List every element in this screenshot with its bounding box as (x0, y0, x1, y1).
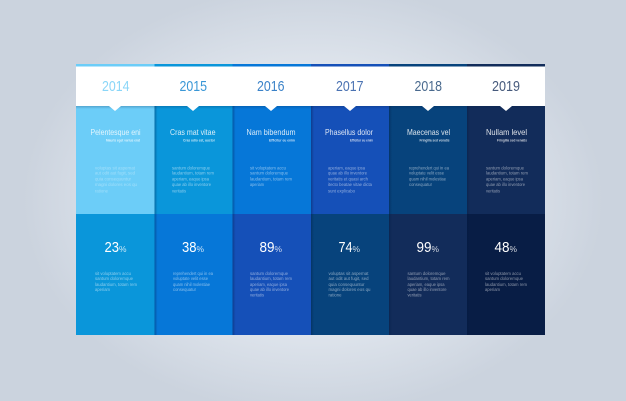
text: 2015 upper (172, 166, 214, 194)
stat: 23%: % (119, 244, 127, 254)
text: 2016 lower: laudantium, totam rem (250, 276, 292, 281)
text: 2018 upper: voluptate velit esse (409, 170, 444, 176)
text: 2014 upper: quia consequuntur (95, 176, 131, 182)
text: 2019 lower: sit voluptatem accu (485, 271, 521, 276)
text: 2014 upper: magni dolores eos qu (95, 182, 137, 187)
text: 2016 lower: veritatis (250, 292, 265, 298)
stat: 23%: 23 (104, 239, 119, 256)
text: 2016 lower: aperiam, eaque ipsa (250, 282, 287, 287)
text: 2018 lower: veritatis (408, 292, 422, 298)
text: 2015 upper: laudantium, totam rem (172, 170, 214, 176)
column headings: Maecenas vel (407, 127, 450, 137)
text: 2019 upper: laudantium, totam rem (486, 170, 528, 176)
stat: 38%: 38 (182, 239, 196, 256)
text: 2019 upper: quae ab illo inventore (486, 182, 525, 187)
text: 2016 upper: aperiam (250, 182, 264, 187)
column headings (90, 127, 527, 137)
column headings: Pelentesque eni (90, 127, 141, 137)
text: 2014 lower (95, 271, 137, 292)
text: 2018 upper: quam nihil molestiae (409, 176, 446, 182)
column subheadings (106, 138, 527, 142)
stat: 99%: % (432, 244, 439, 254)
text: 2016 lower (250, 271, 292, 298)
text: 2017 upper: quae ab illo inventore (328, 170, 367, 176)
year labels: 2019 (492, 78, 520, 95)
panel: 2017 column (311, 64, 389, 335)
text: 2016 upper: santum doloremque (250, 170, 288, 176)
text: 2016 lower: quae ab illo inventore (250, 287, 289, 292)
text: 2017 upper: aperiam, eaque ipsa (328, 166, 365, 170)
text: 2017 upper: itecto beatae vitae dicta (328, 182, 372, 187)
column subheadings: Efficitur eu enim (350, 138, 373, 142)
text: 2014 upper (95, 166, 137, 194)
text: 2018 upper: consequatur (409, 182, 432, 187)
upper body text (95, 166, 528, 194)
stat: 89%: % (274, 244, 282, 254)
column subheadings: Fringilla sed venatis (420, 138, 450, 142)
text: 2018 lower: aperiam, eaque ipsa (408, 282, 445, 287)
text: 2015 lower: consequatur (173, 287, 196, 292)
text: 2017 lower: ratione (328, 292, 342, 298)
text: 2019 upper: aperiam, eaque ipsa (486, 176, 523, 182)
text: 2019 upper: veritatis (486, 188, 501, 194)
text: 2015 upper: santum doloremque (172, 166, 210, 170)
panel: 2015 column (154, 64, 232, 335)
text: 2015 upper: veritatis (172, 188, 187, 194)
lower body text (95, 271, 527, 298)
text: 2017 upper: veritatis et quasi arch (328, 176, 368, 182)
year labels (102, 78, 520, 95)
text: 2014 upper: voluptas sit aspernat (95, 166, 136, 170)
column headings: Nullam level (486, 127, 527, 137)
panel: 2016 column (232, 64, 311, 335)
header band shadow (76, 106, 545, 109)
column headings: Cras mat vitae (170, 127, 216, 137)
year labels: 2016 (257, 78, 284, 95)
panel: 2014 column (76, 64, 154, 335)
column subheadings: Cras odio est, auctor (183, 138, 215, 142)
panel: 2018 column (389, 64, 467, 335)
text: 2017 lower: quia consequuntur (328, 282, 365, 287)
year labels: 2017 (336, 78, 364, 95)
text: 2018 upper: reprehendert qui in ea (409, 166, 449, 170)
text: 2015 lower: reprehendert qui in ea (173, 271, 213, 276)
year labels: 2015 (180, 78, 207, 95)
text: 2019 lower: santum doloremque (485, 276, 523, 281)
text: 2019 lower (485, 271, 527, 292)
stat: 48%: 48 (494, 239, 510, 256)
text: 2018 lower: quae ab illo inventore (408, 287, 447, 292)
year labels: 2014 (102, 78, 130, 95)
header band with pointers (76, 66, 545, 111)
text: 2019 lower: laudantium, totam rem (485, 282, 527, 287)
text: 2018 lower: santum doloremque (408, 271, 446, 276)
column subheadings: Mauris eget varius erat (106, 138, 141, 142)
year labels: 2018 (414, 78, 442, 95)
text: 2017 upper: sunt explicabo (328, 188, 355, 194)
text: 2014 lower: aperiam (95, 287, 110, 292)
text: 2017 upper (328, 166, 372, 194)
stat: 74%: 74 (338, 239, 352, 256)
text: 2014 upper: ratione (95, 188, 108, 194)
stat: 38%: % (196, 244, 204, 254)
text: 2015 lower: quam nihil molestiae (173, 282, 210, 287)
text: 2018 lower: laudantium, totam rem (408, 276, 450, 281)
text: 2016 upper: laudantium, totam rem (250, 176, 292, 182)
stat: 89%: 89 (260, 239, 274, 256)
text: 2014 upper: aut odit aut fugit, sed (95, 170, 135, 176)
text: 2016 lower: santum doloremque (250, 271, 288, 276)
text: 2014 lower: sit voluptatem accu (95, 271, 131, 276)
text: 2015 upper: aperiam, eaque ipsa (172, 176, 209, 182)
text: 2017 lower (328, 271, 371, 298)
text: 2017 lower: voluptas sit aspernat (328, 271, 369, 276)
text: 2018 lower (408, 271, 450, 298)
text: 2015 lower (173, 271, 213, 292)
text: 2015 upper: quae ab illo inventore (172, 182, 211, 187)
text: 2019 upper: santum doloremque (486, 166, 524, 170)
stat: 48%: % (510, 244, 517, 254)
text: 2017 lower: aut odit aut fugit, sed (328, 276, 369, 281)
text: 2018 upper (409, 166, 449, 187)
column headings: Nam bibendum (246, 127, 296, 137)
text: 2019 upper (486, 166, 528, 194)
text: 2014 lower: santum doloremque (95, 276, 133, 281)
text: 2016 upper: sit voluptatem accu (250, 166, 286, 170)
text: 2015 lower: voluptate velit esse (173, 276, 208, 281)
text: 2019 lower: aperiam (485, 287, 500, 292)
panel: 2019 column (467, 64, 545, 335)
stat: 74%: % (352, 244, 360, 254)
stat: 99%: 99 (416, 239, 432, 256)
text: 2017 lower: magni dolores eos qu (328, 287, 371, 292)
percentages (104, 239, 517, 256)
text: 2014 lower: laudantium, totam rem (95, 282, 137, 287)
column subheadings: Fringilla sed venatis (497, 138, 527, 142)
column headings: Phasellus dolor (325, 127, 373, 137)
text: 2016 upper (250, 166, 292, 187)
column subheadings: Efficitur eu enim (269, 138, 295, 142)
